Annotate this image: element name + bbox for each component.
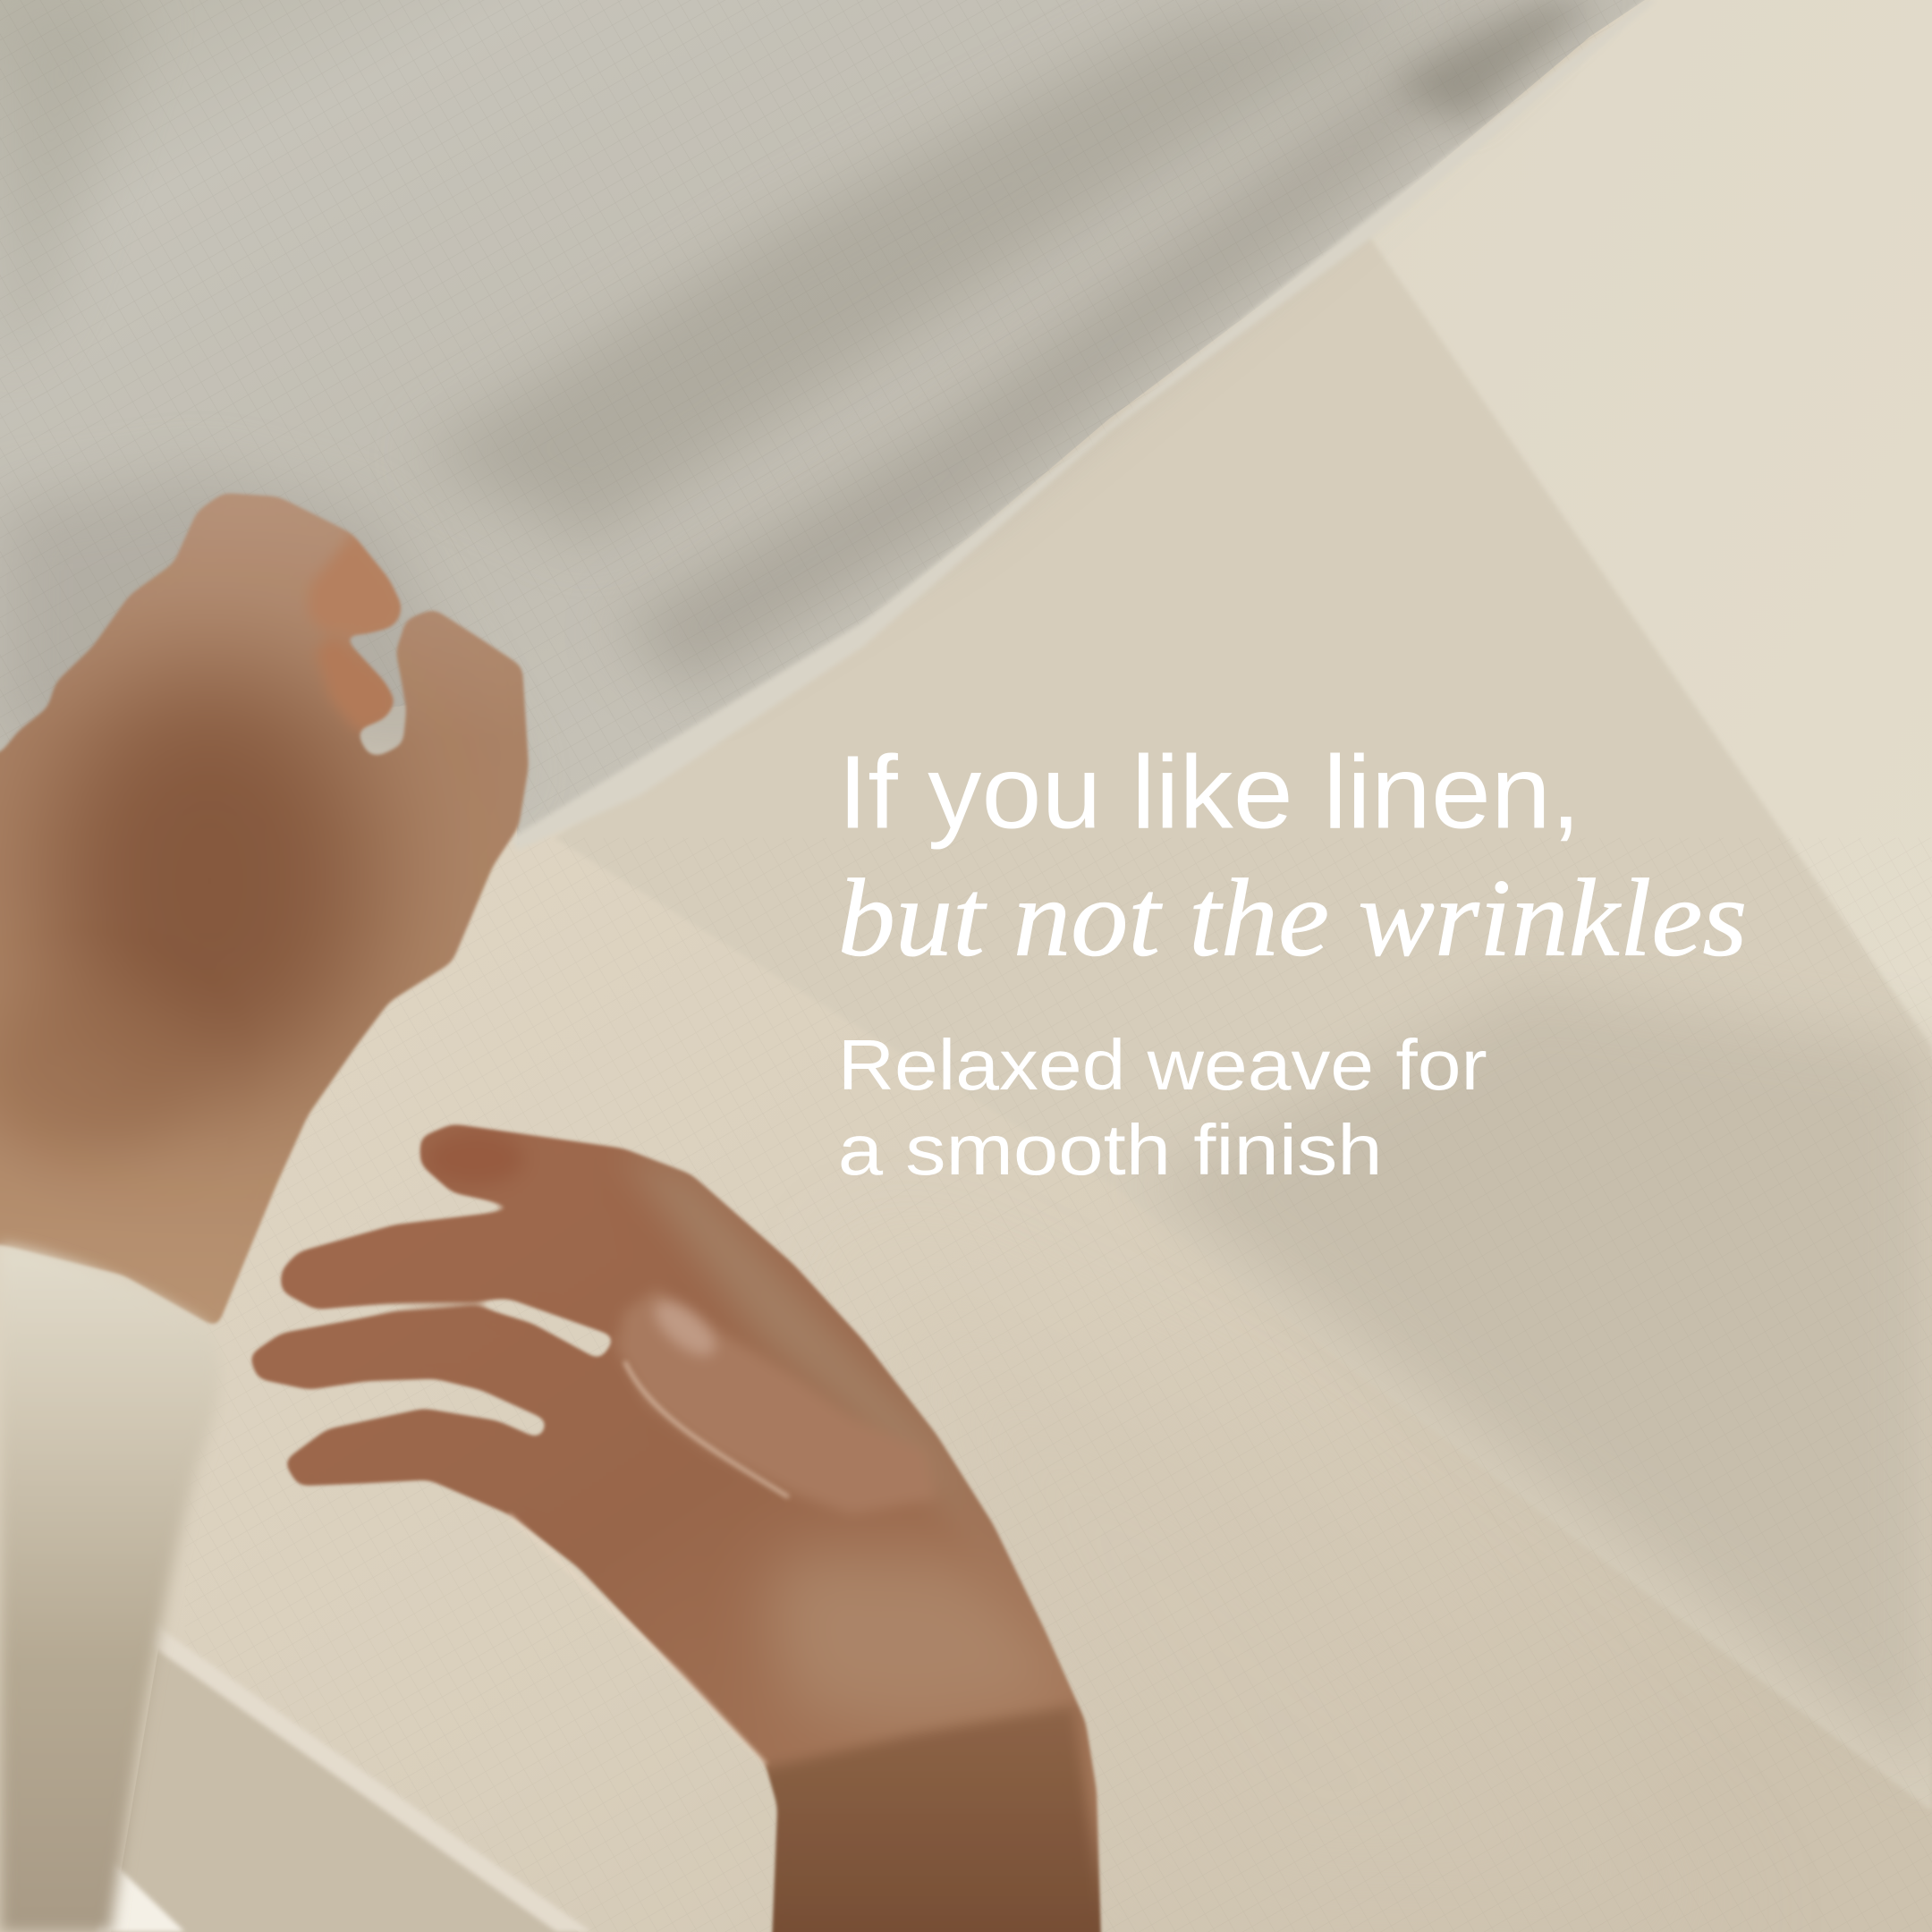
finger one — [308, 533, 402, 634]
headline line 2 in italic serif: but not the wrinkles — [838, 857, 1747, 979]
thumb — [617, 1289, 936, 1514]
thumbnail — [646, 1292, 724, 1365]
grey linen curtain held up — [0, 0, 1657, 851]
subhead line 1: Relaxed weave for — [838, 1025, 1487, 1105]
outer index edge tone — [616, 1146, 1045, 1630]
sleeve cuff — [0, 1244, 221, 1932]
upper right light fabric panel — [1355, 0, 1932, 1060]
hand base colour — [234, 1109, 1122, 1932]
wrist shadow — [0, 1014, 165, 1161]
fingertip blush — [425, 1131, 523, 1185]
thumb and palm rim highlights — [509, 1361, 789, 1765]
finger two — [320, 640, 392, 730]
icon: lower open hand — [234, 1109, 1122, 1932]
palm heel — [765, 1551, 1068, 1731]
wrist — [740, 1706, 1109, 1932]
headline and subhead text — [838, 734, 1747, 1190]
headline line 1: If you like linen, — [838, 734, 1580, 851]
subhead line 2: a smooth finish — [838, 1110, 1383, 1190]
hand base colour — [0, 480, 542, 1343]
middle fabric fold — [185, 234, 1932, 1932]
lower hand body — [234, 1109, 1122, 1932]
lower left fabric edge — [96, 1622, 591, 1932]
icon: upper hand gripping the fabric — [0, 480, 542, 1343]
hand central shadow — [43, 672, 376, 1090]
